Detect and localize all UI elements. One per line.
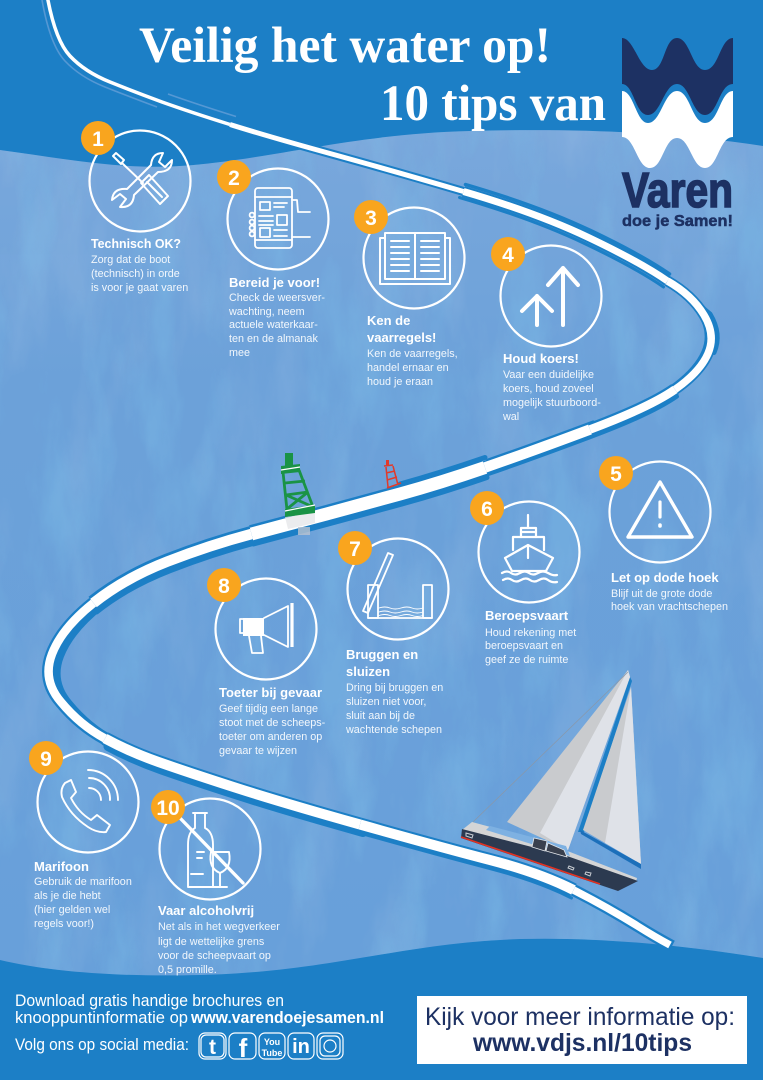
- tip 1: technisch OK: [81, 121, 190, 294]
- tip 2: bereid je voor: Check de weersver-: [229, 292, 325, 304]
- social media icons: f: [239, 1033, 248, 1063]
- icon: ship on waves: [502, 515, 557, 582]
- tip 1: technisch OK: 1: [92, 128, 104, 151]
- icon: raised bridge and lock: [363, 553, 432, 618]
- tip 6: beroepsvaart: [470, 491, 580, 666]
- tip 9: marifoon: [29, 741, 138, 930]
- social media icons: t: [209, 1036, 216, 1059]
- logo: Varen doe je Samen: [622, 38, 733, 230]
- sailboat: [461, 670, 641, 891]
- social media icons: in: [292, 1036, 310, 1058]
- jib: [583, 687, 641, 864]
- hull: [462, 822, 637, 882]
- tip 3: ken de vaarregels: Ken de: [367, 313, 410, 328]
- footer text: [15, 991, 384, 1054]
- tip 7: bruggen en sluizen: [338, 531, 448, 736]
- tip 8: toeter bij gevaar: [207, 568, 326, 757]
- tip 8: toeter bij gevaar: stoot met de scheeps-: [219, 717, 326, 729]
- tip 8: toeter bij gevaar: Toeter bij gevaar: [219, 685, 322, 700]
- tip 3: ken de vaarregels: handel ernaar en: [367, 362, 449, 374]
- tip 5: let op dode hoek: Let op dode hoek: [611, 570, 719, 585]
- tip 7: bruggen en sluizen: sluizen niet voor,: [346, 696, 426, 708]
- red buoy: [384, 460, 401, 488]
- tip 9: marifoon: regels voor!): [34, 918, 94, 930]
- tip 3: ken de vaarregels: vaarregels!: [367, 330, 436, 345]
- tip 1: technisch OK: (technisch) in orde: [91, 268, 180, 280]
- tip 4: houd koers: Houd koers!: [503, 351, 579, 366]
- tip 3: ken de vaarregels: Ken de vaarregels,: [367, 348, 458, 360]
- tip 8: toeter bij gevaar: 8: [218, 575, 230, 598]
- tip 2: bereid je voor: [217, 160, 328, 359]
- tip 7: bruggen en sluizen: sluizen: [346, 664, 390, 679]
- icon: warning triangle: [628, 482, 692, 537]
- tip 7: bruggen en sluizen: sluit aan bij de: [346, 710, 415, 722]
- tip 9: marifoon: 9: [40, 748, 52, 771]
- footer text: Download gratis handige brochures en: [15, 991, 284, 1010]
- tip 1: technisch OK: is voor je gaat varen: [91, 282, 188, 294]
- tip 2: bereid je voor: actuele waterkaar-: [229, 319, 318, 331]
- icon: megaphone: [240, 603, 292, 653]
- tip 2: bereid je voor: ten en de almanak: [229, 333, 318, 345]
- title: Veilig het water op!: [139, 18, 551, 74]
- tip 3: ken de vaarregels: [354, 200, 464, 388]
- tip 5: let op dode hoek: Blijf uit de grote dode: [611, 588, 712, 600]
- tip 8: toeter bij gevaar: gevaar te wijzen: [219, 745, 297, 757]
- tip 10: vaar alcoholvrij: 10: [156, 797, 180, 820]
- icon: phone with signal arcs: [61, 770, 118, 832]
- title: 10 tips van: [380, 76, 606, 132]
- more-information box: Kijk voor meer informatie op:: [425, 1003, 735, 1031]
- social media icons: You: [264, 1037, 280, 1047]
- tip 7: bruggen en sluizen: wachtende schepen: [345, 724, 442, 736]
- tip 4: houd koers: wal: [502, 411, 519, 423]
- tip 7: bruggen en sluizen: Bruggen en: [346, 647, 418, 662]
- tip 7: bruggen en sluizen: 7: [349, 538, 361, 561]
- tip 7: bruggen en sluizen: Dring bij bruggen en: [346, 682, 443, 694]
- mainsail: [578, 677, 632, 832]
- tip 10: vaar alcoholvrij: ligt de wettelijke grens: [158, 936, 265, 948]
- tip 4: houd koers: mogelijk stuurboord-: [503, 397, 601, 409]
- tip 2: bereid je voor: Bereid je voor!: [229, 275, 320, 290]
- icon: wrench and screwdriver: [112, 153, 172, 207]
- social media icons: Tube: [262, 1048, 282, 1058]
- logo: Varen doe je Samen: doe je Samen!: [622, 213, 733, 230]
- icon: two up arrows: [522, 268, 578, 325]
- tip 8: toeter bij gevaar: Geef tijdig een lange: [219, 703, 318, 715]
- tip 6: beroepsvaart: beroepsvaart en: [485, 640, 563, 652]
- tip 3: ken de vaarregels: 3: [365, 207, 377, 230]
- title: [139, 18, 606, 132]
- cabin windows: [532, 838, 567, 857]
- tip 10: vaar alcoholvrij: Net als in het wegverkeer: [158, 921, 280, 933]
- tip 4: houd koers: [491, 237, 602, 423]
- footer text: www.varendoejesamen.nl: [190, 1008, 384, 1027]
- tip 5: let op dode hoek: [599, 456, 728, 613]
- tip 2: bereid je voor: wachting, neem: [228, 306, 305, 318]
- brush streaks: [57, 184, 717, 898]
- tip 1: technisch OK: Zorg dat de boot: [91, 254, 170, 266]
- tip 5: let op dode hoek: hoek van vrachtschepen: [611, 601, 728, 613]
- logo: Varen doe je Samen: Varen: [622, 164, 733, 218]
- tip 10: vaar alcoholvrij: 0,5 promille.: [158, 964, 217, 976]
- tip 6: beroepsvaart: Beroepsvaart: [485, 608, 569, 623]
- footer text: knooppuntinformatie op: [15, 1008, 188, 1027]
- icon: open book: [380, 233, 450, 284]
- more-information box: www.vdjs.nl/10tips: [472, 1029, 692, 1057]
- tip 9: marifoon: Gebruik de marifoon: [34, 876, 132, 888]
- tip 9: marifoon: (hier gelden wel: [34, 904, 110, 916]
- more-information box: [417, 996, 747, 1064]
- icon: tablet with chart pages: [250, 188, 310, 248]
- icon: crossed-out bottle and glass: [180, 813, 243, 887]
- tip 6: beroepsvaart: geef ze de ruimte: [485, 654, 568, 666]
- tip 1: technisch OK: Technisch OK?: [91, 236, 181, 251]
- tip 5: let op dode hoek: 5: [610, 463, 622, 486]
- tip 3: ken de vaarregels: houd je eraan: [367, 376, 433, 388]
- tip 6: beroepsvaart: 6: [481, 498, 493, 521]
- tip 2: bereid je voor: mee: [229, 347, 250, 359]
- tip 4: houd koers: koers, houd zoveel: [503, 383, 594, 395]
- tip 10: vaar alcoholvrij: voor de scheepvaart op: [158, 950, 271, 962]
- tip 4: houd koers: Vaar een duidelijke: [503, 369, 594, 381]
- social media icons: [199, 1033, 343, 1063]
- footer text: Volg ons op social media:: [15, 1035, 189, 1054]
- tip 6: beroepsvaart: Houd rekening met: [485, 627, 576, 639]
- tip 10: vaar alcoholvrij: [151, 790, 280, 976]
- green buoy: [281, 453, 315, 535]
- tip 9: marifoon: Marifoon: [34, 859, 89, 874]
- tip 9: marifoon: als je die hebt: [34, 890, 101, 902]
- tip 4: houd koers: 4: [502, 244, 514, 267]
- winding river route: [42, 0, 717, 946]
- tip 2: bereid je voor: 2: [228, 167, 240, 190]
- tip 8: toeter bij gevaar: toeter om anderen op: [219, 731, 322, 743]
- tip 10: vaar alcoholvrij: Vaar alcoholvrij: [158, 903, 254, 918]
